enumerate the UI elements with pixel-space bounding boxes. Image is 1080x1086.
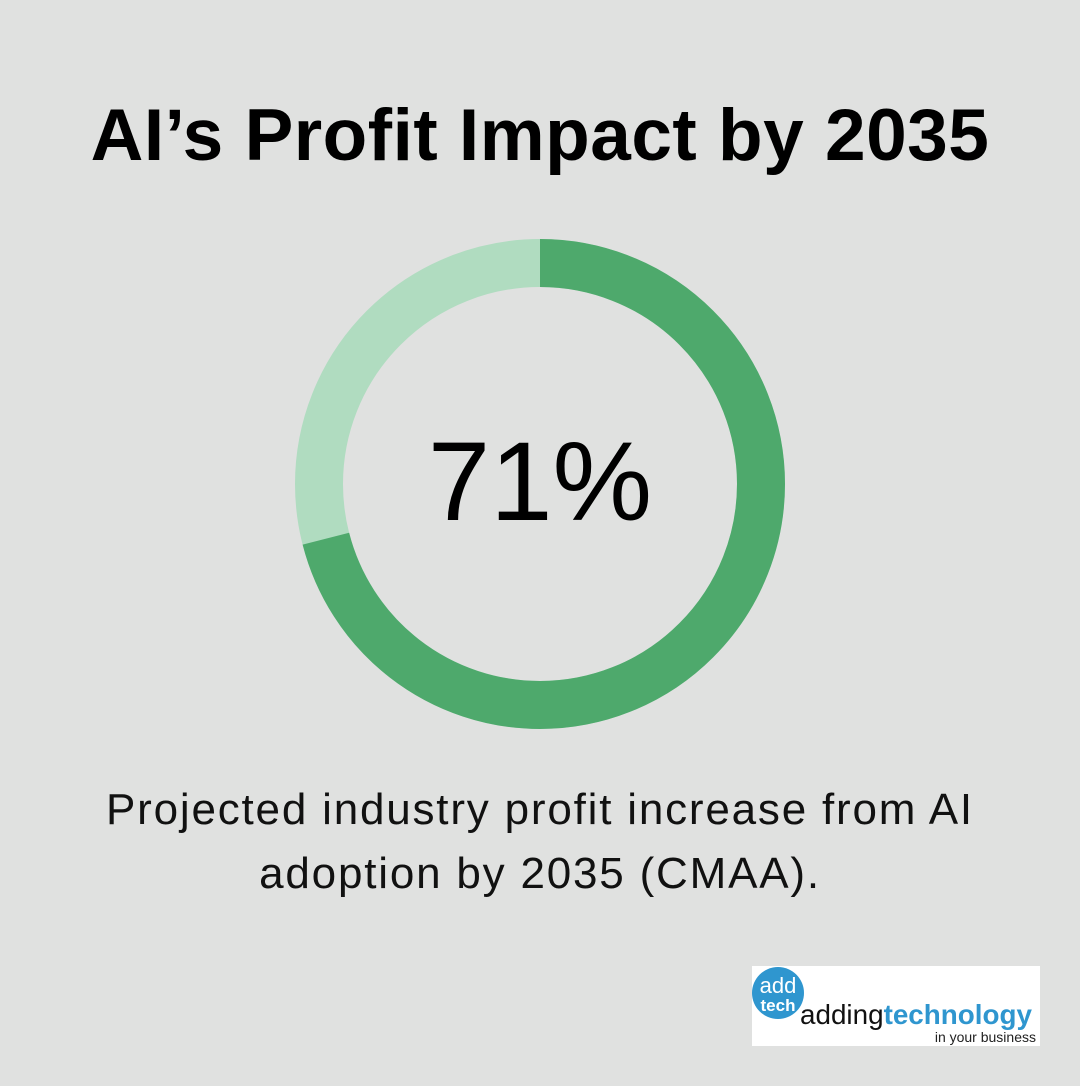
logo: [752, 966, 1040, 1046]
title: AI’s Profit Impact by 2035: [91, 95, 989, 176]
donut chart: 71%: [428, 419, 652, 544]
logo: tech: [761, 996, 795, 1015]
caption: Projected industry profit increase from AI adoption by 2035 (CMAA).: [106, 785, 974, 898]
logo: in your business: [935, 1029, 1036, 1045]
logo: addingtechnology: [800, 999, 1032, 1030]
logo: add: [760, 973, 796, 998]
